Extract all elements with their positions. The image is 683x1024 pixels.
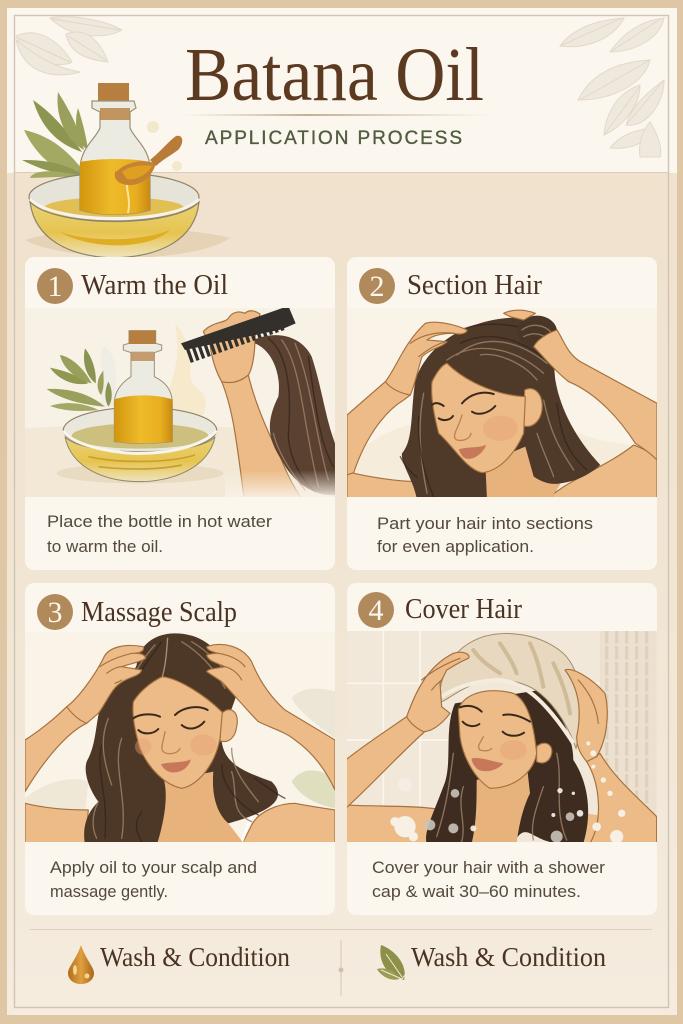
subtitle: APPLICATION PROCESS bbox=[205, 128, 462, 149]
step 1 badge: 1 bbox=[48, 270, 62, 303]
step 2 badge bbox=[359, 268, 395, 304]
step 1 badge bbox=[37, 268, 73, 304]
decorative leaves top left bbox=[16, 17, 122, 75]
panel 3: massage scalp bbox=[25, 583, 335, 915]
panel 1: warm the oil bbox=[25, 257, 335, 570]
title underline bbox=[185, 114, 490, 116]
step 3 caption bbox=[50, 859, 257, 901]
panel 2: section hair bbox=[347, 257, 657, 570]
step 2 heading: Section Hair bbox=[407, 270, 543, 301]
step 1 caption bbox=[47, 513, 273, 556]
step 3 badge: 3 bbox=[48, 596, 62, 629]
step 2 illustration bbox=[347, 300, 657, 500]
step 3 badge bbox=[37, 594, 73, 630]
icon: leaf sprig bbox=[377, 945, 412, 980]
step 1 caption: Place the bottle in hot water bbox=[47, 513, 273, 531]
footer item: oil drop bbox=[68, 942, 290, 984]
step 4 heading: Cover Hair bbox=[405, 594, 523, 625]
step 2 caption: for even application. bbox=[377, 538, 534, 556]
step 1 heading: Warm the Oil bbox=[81, 270, 228, 301]
footer item: leaf bbox=[377, 942, 606, 980]
decorative leaves top right bbox=[560, 18, 664, 157]
step 4 illustration bbox=[340, 630, 670, 847]
step 3 caption: Apply oil to your scalp and bbox=[50, 859, 257, 877]
step 2 caption bbox=[377, 515, 593, 556]
step 1 illustration bbox=[25, 300, 335, 503]
footer rule and divider bbox=[30, 930, 652, 996]
header illustration: oil bottle in bowl bbox=[22, 83, 230, 258]
step 4 badge bbox=[358, 592, 394, 628]
step 4 caption: Cover your hair with a shower bbox=[372, 859, 606, 877]
title: Batana Oil bbox=[185, 33, 484, 117]
footer label 1: Wash & Condition bbox=[100, 942, 290, 972]
footer label 2: Wash & Condition bbox=[411, 942, 606, 972]
step 2 badge: 2 bbox=[370, 270, 384, 303]
step 3 caption: massage gently. bbox=[50, 883, 168, 901]
step 4 caption: cap & wait 30–60 minutes. bbox=[372, 883, 581, 901]
icon: oil drop bbox=[68, 945, 94, 984]
step 1 caption: to warm the oil. bbox=[47, 538, 163, 556]
step 2 caption: Part your hair into sections bbox=[377, 515, 593, 533]
step 4 caption bbox=[372, 859, 606, 901]
panel 4: cover hair bbox=[340, 583, 670, 915]
step 3 illustration bbox=[25, 625, 335, 845]
soap foam bbox=[390, 741, 625, 843]
step 3 heading: Massage Scalp bbox=[81, 597, 237, 628]
step 4 badge: 4 bbox=[368, 594, 384, 627]
